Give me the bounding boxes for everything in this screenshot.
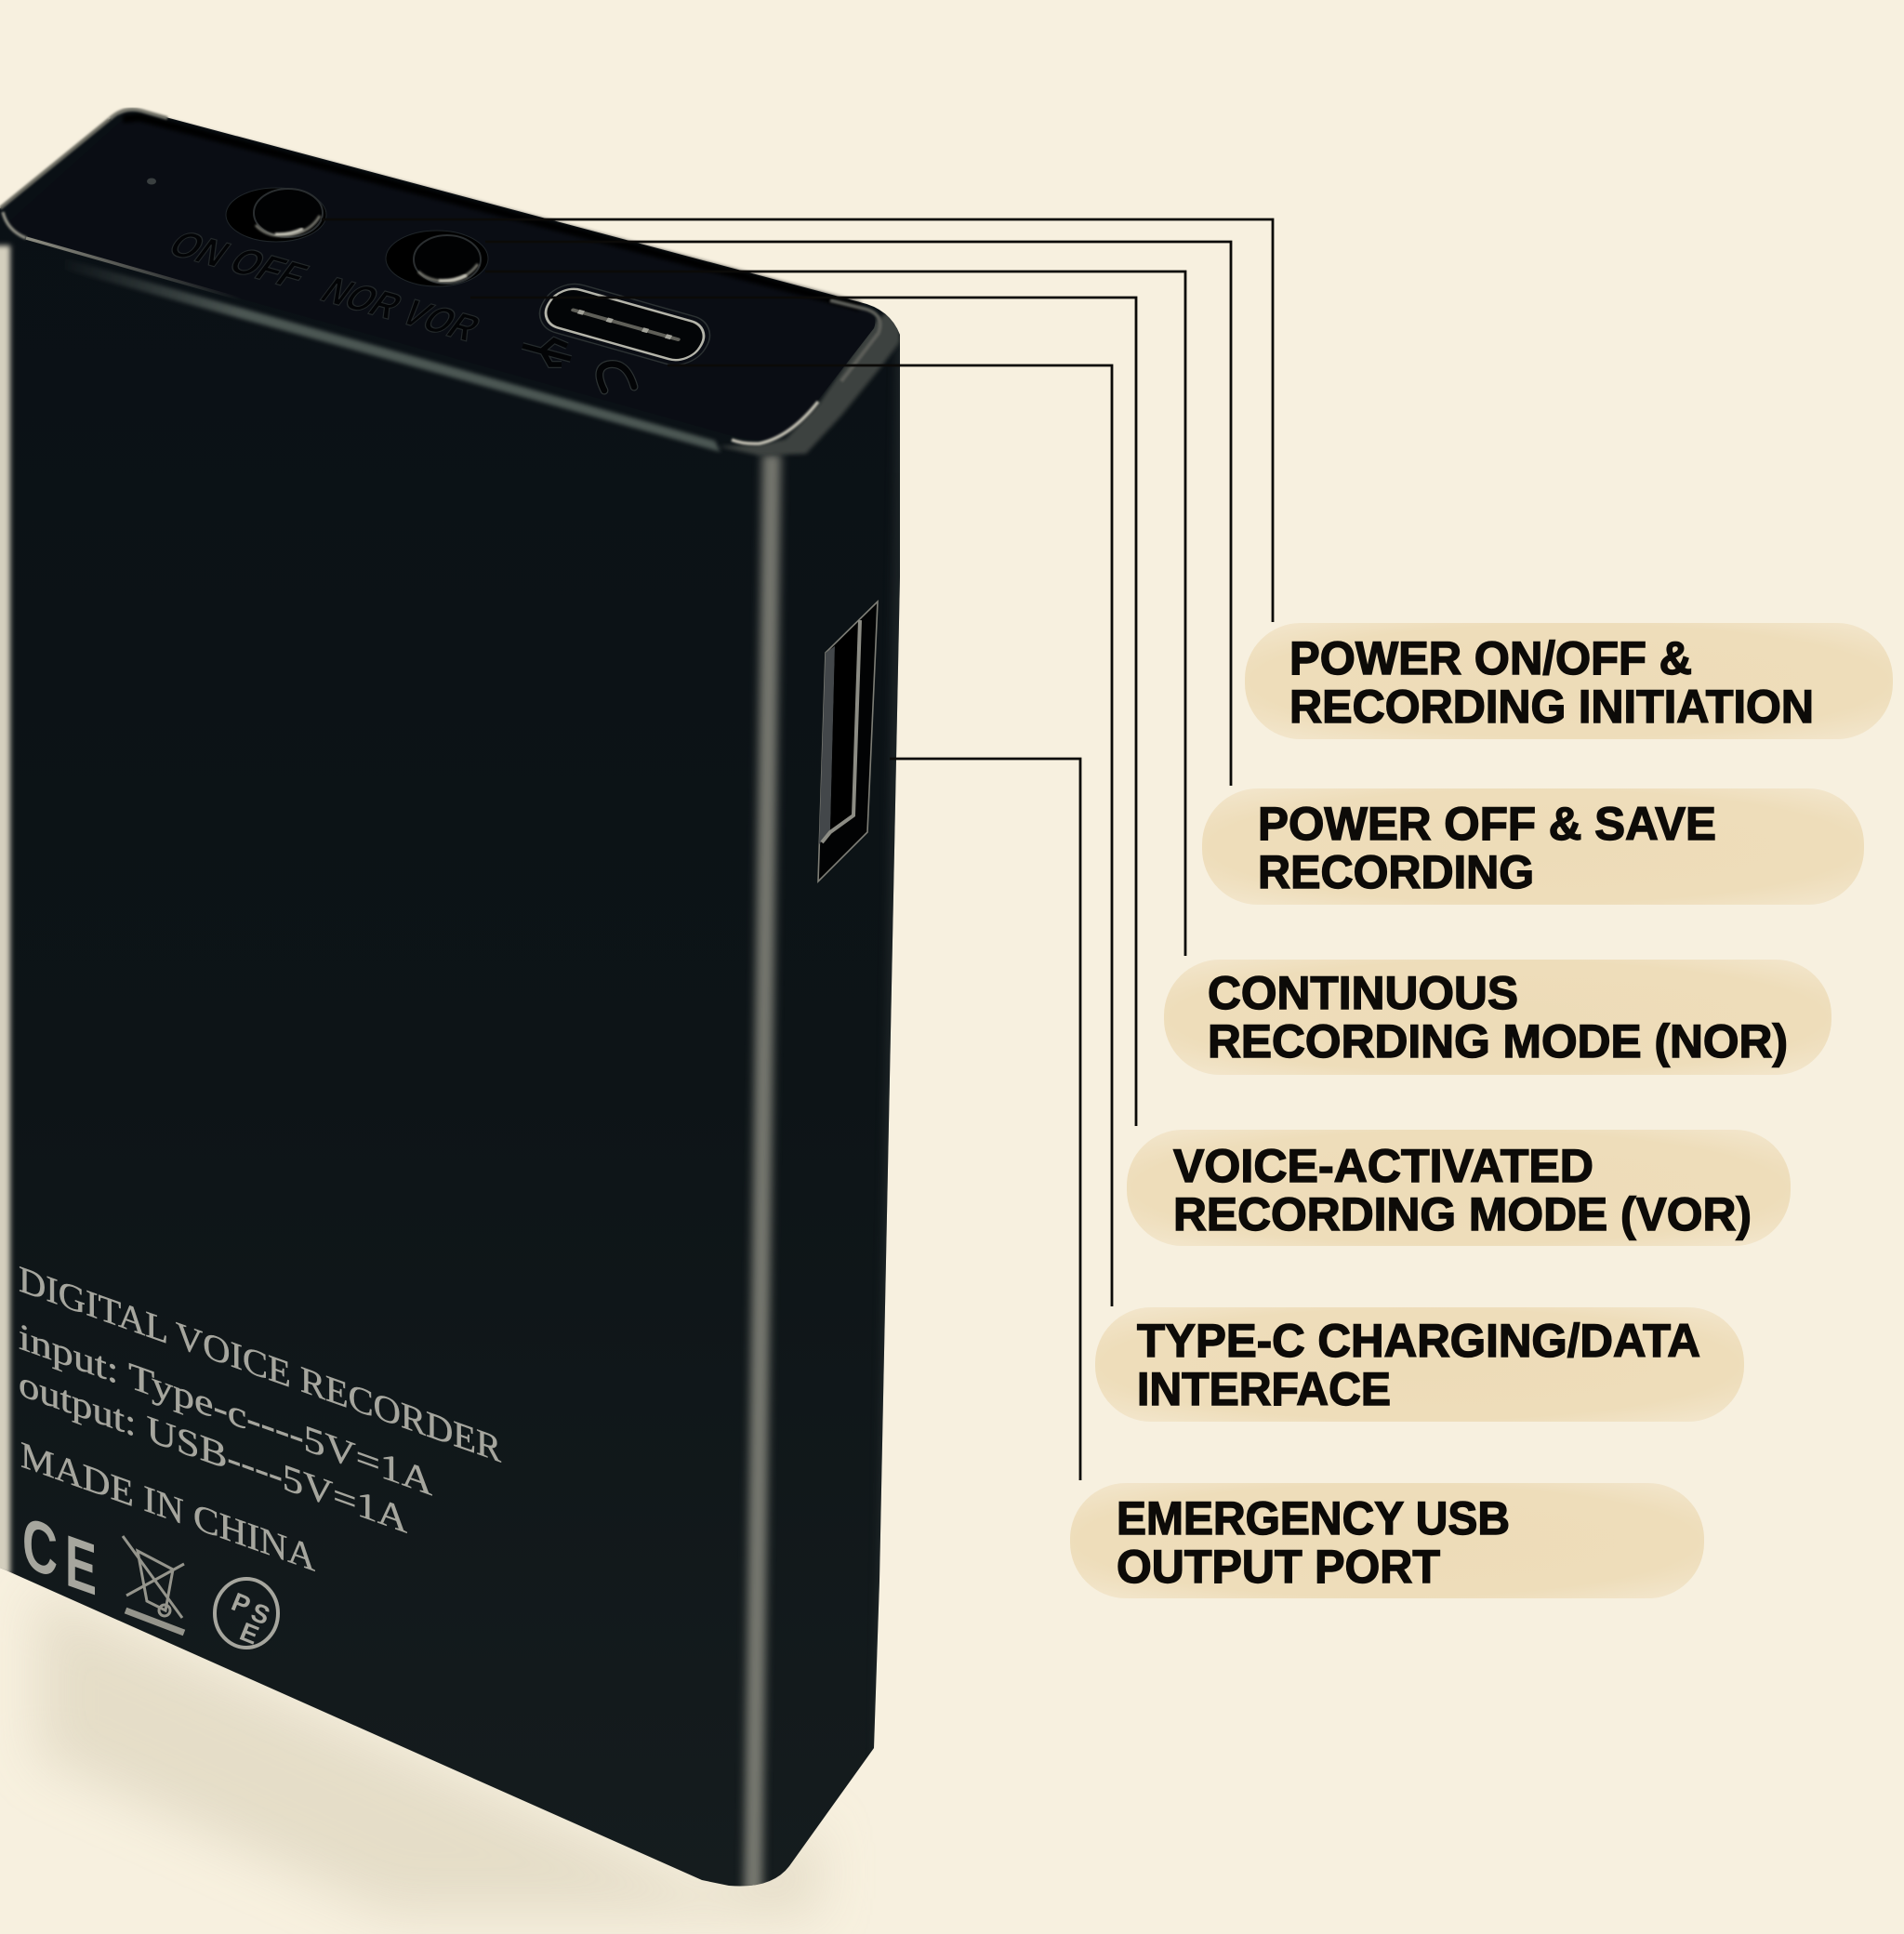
callout: power off and save recording: RECORDING bbox=[1258, 846, 1534, 898]
callout: voice-activated recording mode bbox=[1127, 1130, 1791, 1246]
leader line: power off and save bbox=[485, 242, 1231, 786]
body shading and highlights bbox=[0, 245, 909, 1897]
icon: crossed-out bin bbox=[123, 1536, 184, 1633]
top edge dark band bbox=[123, 117, 860, 307]
leader line: emergency usb bbox=[890, 759, 1080, 1480]
callout: power on/off and recording initiation: RECORDING INITIATION bbox=[1289, 681, 1814, 733]
icon: usb symbol bbox=[522, 340, 571, 364]
usb-a emergency port bbox=[818, 602, 878, 881]
icon: ce mark: C bbox=[22, 1501, 58, 1595]
printed text: device information: output: USB----5V=1A bbox=[19, 1361, 407, 1542]
leader line: voice-activated recording bbox=[470, 298, 1136, 1126]
callout: power on/off and recording initiation bbox=[1245, 623, 1893, 739]
printed text: device information: MADE IN CHINA bbox=[20, 1433, 315, 1580]
metal rim highlights bbox=[0, 110, 880, 444]
device: digital voice recorder bbox=[0, 110, 909, 1897]
printed text: device information: DIGITAL VOICE RECORDER bbox=[19, 1257, 501, 1471]
label: on off: ON OFF bbox=[160, 224, 316, 297]
icon: pse mark: P bbox=[228, 1587, 255, 1621]
usb-c port bbox=[530, 278, 720, 371]
microphone hole bbox=[147, 179, 156, 184]
callout: voice-activated recording mode: VOICE-ACTIVATED bbox=[1173, 1140, 1593, 1192]
icon: pse mark: S bbox=[247, 1597, 274, 1631]
soft shadow under device bbox=[37, 1590, 818, 1915]
button: nor vor bbox=[386, 231, 488, 286]
callout: voice-activated recording mode: RECORDING MODE (VOR) bbox=[1173, 1188, 1752, 1240]
icon: pse mark: E bbox=[236, 1617, 263, 1650]
printed text: device information: input: Type-c----5V=1A bbox=[19, 1315, 432, 1503]
device body bbox=[0, 110, 900, 1887]
callout: emergency usb output port bbox=[1070, 1483, 1704, 1598]
callout: power off and save recording: POWER OFF & SAVE bbox=[1258, 798, 1716, 850]
callout: emergency usb output port: EMERGENCY USB bbox=[1117, 1492, 1510, 1544]
leader line: continuous recording bbox=[485, 272, 1185, 956]
leader line: type-c interface bbox=[668, 365, 1112, 1306]
leader line: power on/off bbox=[322, 219, 1273, 622]
callout: type-c charging and data interface bbox=[1095, 1307, 1744, 1422]
callout: continuous recording mode bbox=[1164, 960, 1831, 1075]
icon: ce mark: E bbox=[65, 1519, 97, 1612]
icon: pse mark bbox=[215, 1579, 278, 1650]
callout: continuous recording mode: RECORDING MODE (NOR) bbox=[1208, 1015, 1788, 1067]
callout: type-c charging and data interface: INTERFACE bbox=[1137, 1363, 1391, 1415]
callout: power off and save recording bbox=[1202, 788, 1864, 905]
icon: headphone symbol bbox=[600, 364, 634, 391]
icon: ce mark bbox=[22, 1501, 97, 1612]
button: on off bbox=[226, 188, 326, 242]
label: nor vor: NOR VOR bbox=[312, 271, 489, 349]
top face bbox=[9, 118, 875, 440]
callout: emergency usb output port: OUTPUT PORT bbox=[1117, 1541, 1440, 1593]
printed text: device information bbox=[19, 1257, 501, 1580]
callout: continuous recording mode: CONTINUOUS bbox=[1208, 967, 1518, 1019]
callout: type-c charging and data interface: TYPE-C CHARGING/DATA bbox=[1137, 1315, 1700, 1367]
callout: power on/off and recording initiation: POWER ON/OFF & bbox=[1289, 632, 1692, 684]
